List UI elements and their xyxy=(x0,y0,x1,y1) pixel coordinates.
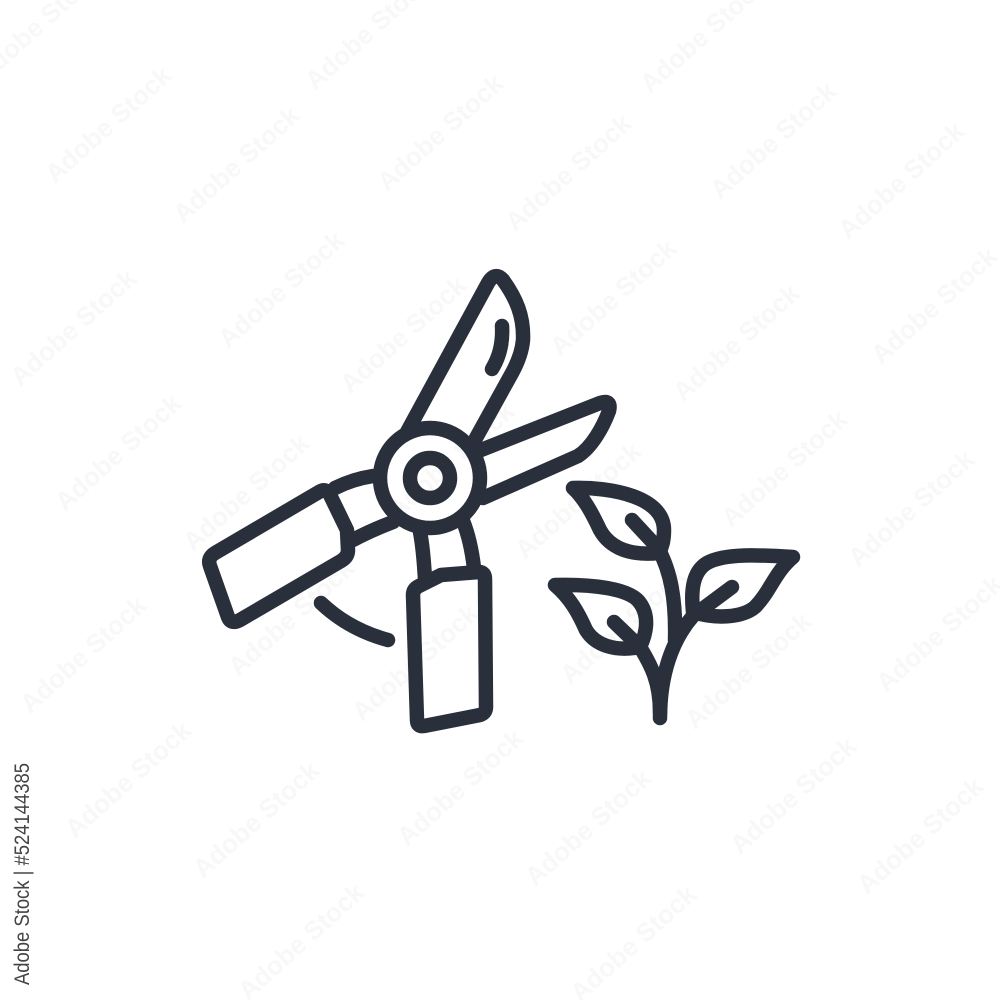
left handle upper arm xyxy=(335,476,373,488)
right blade xyxy=(481,402,610,498)
bottom handle xyxy=(413,572,486,726)
pivot outer ring xyxy=(380,428,480,528)
repeating Adobe Stock watermark: Adobe Stock xyxy=(832,116,970,245)
top leaf vein and centre stem xyxy=(632,520,675,640)
repeating Adobe Stock watermark: Adobe Stock xyxy=(391,723,529,852)
pivot inner ring xyxy=(410,458,450,498)
repeating Adobe Stock watermark: Adobe Stock xyxy=(554,561,692,690)
repeating Adobe Stock watermark: Adobe Stock xyxy=(212,225,350,354)
repeating Adobe Stock watermark: Adobe Stock xyxy=(14,590,152,719)
repeating Adobe Stock watermark: Adobe Stock xyxy=(704,76,842,205)
repeating Adobe Stock watermark: Adobe Stock xyxy=(679,606,817,735)
repeating Adobe Stock watermark: Adobe Stock xyxy=(4,263,142,392)
icon: plant sprig xyxy=(555,488,793,718)
top blade xyxy=(407,276,523,438)
repeating Adobe Stock watermark: Adobe Stock xyxy=(334,270,472,399)
right leaf vein and main stem xyxy=(660,587,732,718)
repeating Adobe Stock watermark: Adobe Stock xyxy=(49,388,187,517)
repeating Adobe Stock watermark: Adobe Stock xyxy=(371,68,509,197)
repeating Adobe Stock watermark: Adobe Stock xyxy=(167,100,305,229)
repeating Adobe Stock watermark: Adobe Stock xyxy=(382,396,520,525)
repeating Adobe Stock watermark: Adobe Stock xyxy=(667,278,805,407)
repeating Adobe Stock watermark: Adobe Stock xyxy=(724,731,862,860)
icon: pruning shears xyxy=(209,276,610,726)
left leaf vein and branch xyxy=(614,622,660,712)
left leaf xyxy=(555,585,646,649)
right leaf xyxy=(692,555,793,616)
bottom handle right arm xyxy=(463,521,474,568)
repeating Adobe Stock watermark: Adobe Stock xyxy=(519,763,657,892)
top leaf xyxy=(573,488,664,554)
stock image id caption: Adobe Stock | #524144385 xyxy=(11,763,34,985)
left handle lower arm xyxy=(353,522,393,540)
left handle xyxy=(209,490,348,622)
motion arc xyxy=(321,603,388,640)
repeating Adobe Stock watermark: Adobe Stock xyxy=(715,404,853,533)
repeating Adobe Stock watermark: Adobe Stock xyxy=(346,598,484,727)
blade highlight xyxy=(492,326,502,369)
repeating Adobe Stock watermark: Adobe Stock xyxy=(509,436,647,565)
repeating Adobe Stock watermark: Adobe Stock xyxy=(59,715,197,844)
repeating Adobe Stock watermark: Adobe Stock xyxy=(851,771,989,900)
repeating Adobe Stock watermark: Adobe Stock xyxy=(544,233,682,362)
repeating Adobe Stock watermark: Adobe Stock xyxy=(187,755,325,884)
repeating Adobe Stock watermark: Adobe Stock xyxy=(499,108,637,237)
repeating Adobe Stock watermark: Adobe Stock xyxy=(842,444,980,573)
repeating Adobe Stock watermark: Adobe Stock xyxy=(177,428,315,557)
repeating Adobe Stock watermark: Adobe Stock xyxy=(39,60,177,189)
repeating Adobe Stock watermark: Adobe Stock xyxy=(222,553,360,682)
repeating Adobe Stock watermark: Adobe Stock xyxy=(865,241,1000,370)
bottom handle left arm xyxy=(420,532,425,579)
